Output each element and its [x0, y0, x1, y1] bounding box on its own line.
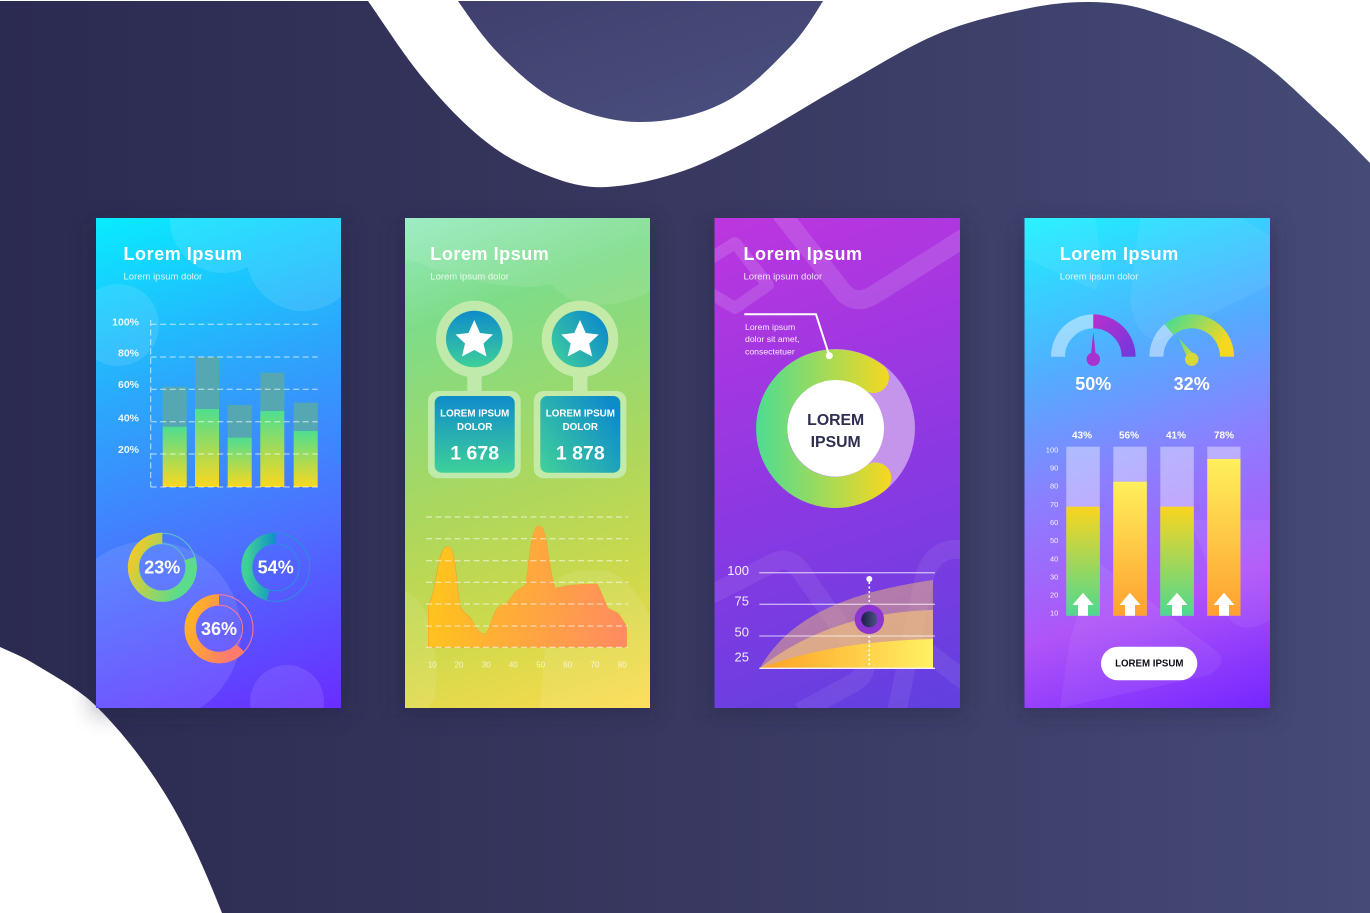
stat badge: 1 878: DOLOR	[563, 422, 598, 433]
bar chart with arrows	[1046, 430, 1240, 618]
area chart	[426, 517, 628, 669]
button: LOREM IPSUM	[1115, 659, 1183, 670]
bar chart with arrows: 41%	[1166, 430, 1186, 441]
background dome	[458, 1, 823, 122]
panel: blue bar chart card	[96, 218, 341, 708]
bar chart: 80%	[118, 348, 140, 360]
layered area chart: 100	[727, 563, 749, 578]
layered area chart: 75	[735, 594, 749, 609]
donut: 23%	[128, 533, 196, 601]
bar chart: 100%	[112, 316, 140, 328]
area chart: 60	[563, 660, 573, 669]
bar chart: 60%	[118, 379, 140, 391]
bar chart with arrows: 78%	[1214, 430, 1234, 441]
layered area chart	[727, 563, 935, 668]
donut: 54%: 54%	[258, 558, 294, 578]
callout: dolor sit amet,	[745, 334, 800, 344]
bar chart with arrows: 50	[1050, 536, 1058, 545]
panel: purple donut card	[714, 218, 960, 708]
bar chart with arrows: 10	[1050, 609, 1058, 618]
heading: card 4: Lorem Ipsum	[1060, 244, 1179, 264]
stat badge: 1 678: 1 678	[450, 442, 499, 464]
bar chart with arrows: 60	[1050, 518, 1058, 527]
gauge: 50%: 50%	[1075, 374, 1111, 394]
callout: consectetuer	[745, 346, 795, 356]
callout	[744, 314, 833, 359]
layered area chart: 25	[735, 650, 749, 665]
donut chart	[756, 349, 915, 508]
panel: green stats card	[405, 218, 650, 708]
bar chart with arrows: 20	[1050, 591, 1058, 600]
donut chart: LOREM	[807, 412, 864, 429]
donut: 36%	[185, 595, 253, 663]
bar chart with arrows: 80	[1050, 482, 1058, 491]
heading: card 1: Lorem Ipsum	[124, 244, 243, 264]
area chart: 80	[618, 660, 627, 669]
bar chart with arrows: 100	[1046, 445, 1058, 454]
bar chart with arrows: 40	[1050, 554, 1058, 563]
donut: 36%: 36%	[201, 619, 237, 639]
stat badge: 1 878	[534, 301, 626, 478]
bar chart	[112, 316, 318, 487]
stat badge: 1 678	[428, 301, 521, 478]
bar chart with arrows: 70	[1050, 500, 1058, 509]
stat badge: 1 678: DOLOR	[457, 422, 492, 433]
bar chart with arrows: 30	[1050, 572, 1058, 581]
donut: 23%: 23%	[144, 558, 180, 578]
callout: Lorem ipsum	[745, 322, 795, 332]
bar chart with arrows: 56%	[1119, 430, 1139, 441]
donut: 54%	[242, 533, 310, 601]
area chart: 30	[482, 660, 491, 669]
subheading: card 4: Lorem ipsum dolor	[1060, 272, 1138, 282]
subheading: card 3: Lorem ipsum dolor	[744, 272, 822, 282]
card shadows	[92, 224, 1274, 714]
button	[1101, 647, 1197, 680]
area chart: 70	[591, 660, 600, 669]
donut chart: IPSUM	[811, 434, 861, 451]
area chart: 10	[428, 660, 437, 669]
subheading: card 2: Lorem ipsum dolor	[430, 272, 509, 282]
bar chart with arrows: 43%	[1072, 430, 1092, 441]
stat badge: 1 678: LOREM IPSUM	[440, 409, 509, 420]
gauge: 32%	[1156, 321, 1227, 394]
stat badge: 1 878: 1 878	[556, 442, 605, 464]
gauge: 50%	[1058, 321, 1129, 394]
bar chart: 20%	[118, 444, 140, 456]
heading: card 3: Lorem Ipsum	[744, 244, 863, 264]
subheading: card 1: Lorem ipsum dolor	[124, 272, 202, 282]
area chart: 50	[536, 660, 546, 669]
area chart: 20	[455, 660, 464, 669]
area chart: 40	[509, 660, 518, 669]
gauge: 32%: 32%	[1174, 374, 1210, 394]
bar chart: 40%	[118, 413, 140, 425]
bar chart with arrows: 90	[1050, 463, 1058, 472]
stat badge: 1 878: LOREM IPSUM	[546, 409, 615, 420]
heading: card 2: Lorem Ipsum	[430, 244, 549, 264]
panel: gauges and bars card	[1024, 218, 1270, 708]
layered area chart: 50	[735, 625, 749, 640]
